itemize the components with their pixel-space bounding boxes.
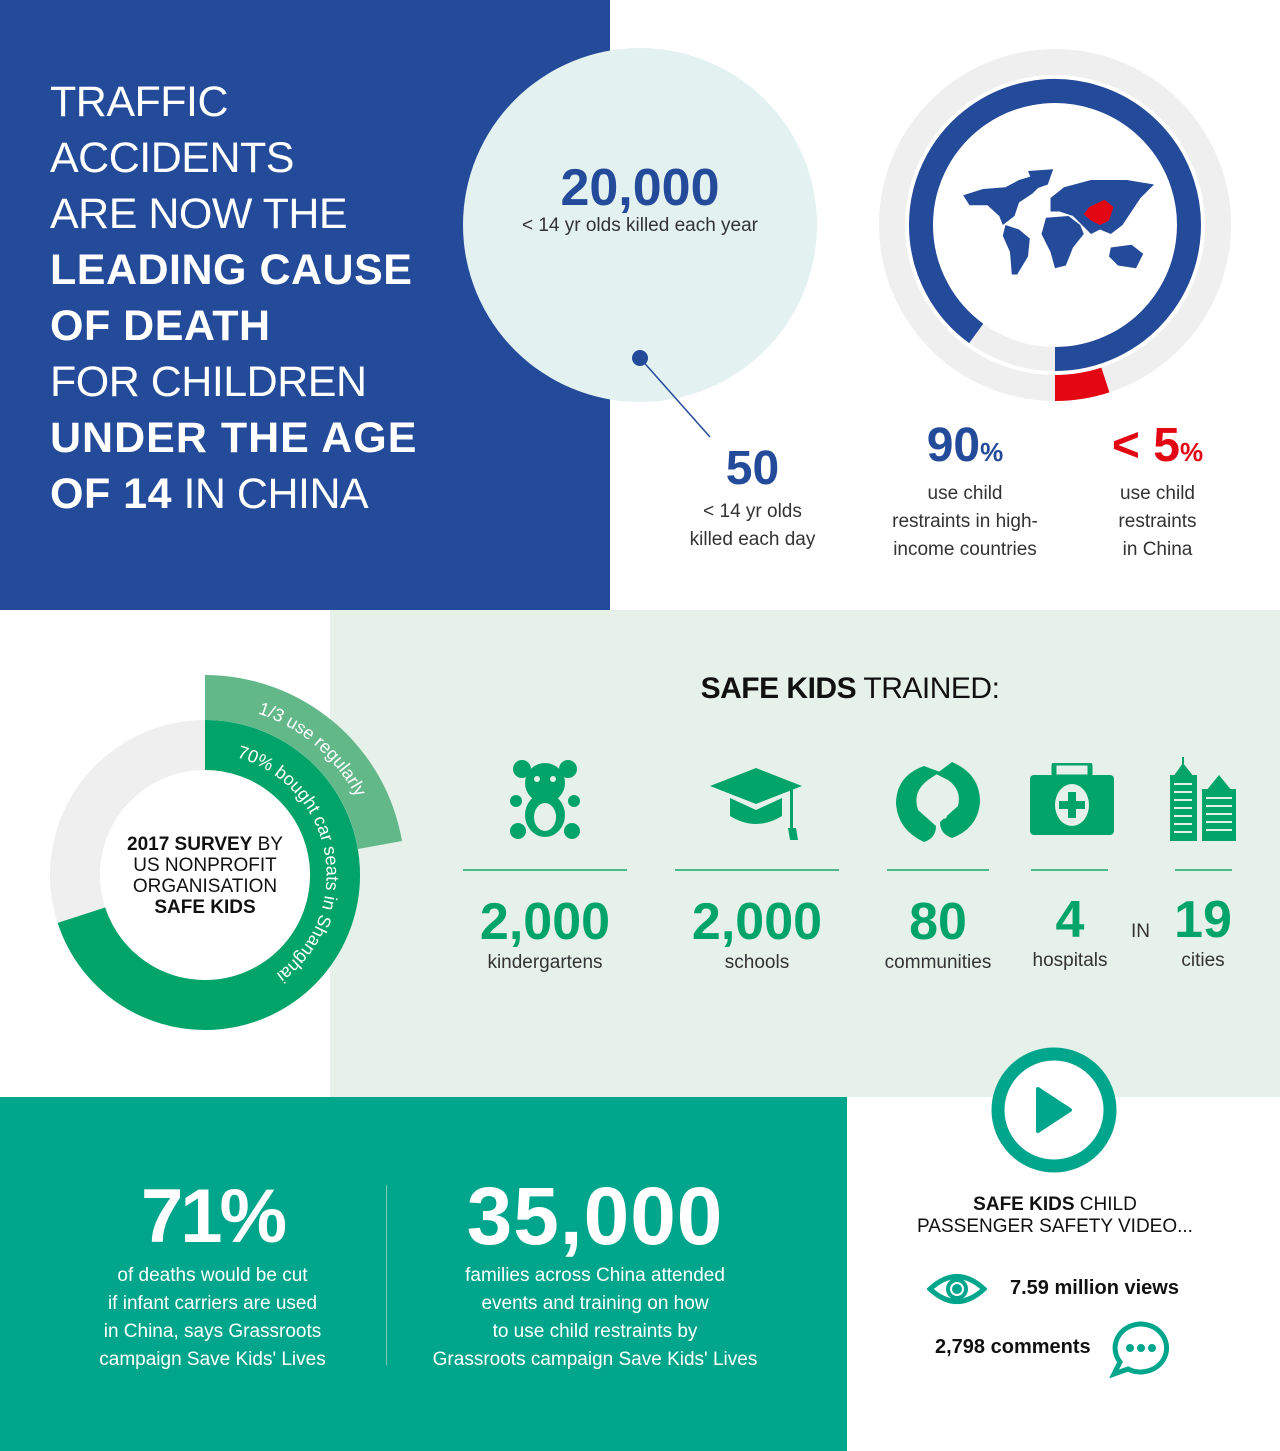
circle stat: 20,000: < 14 yr olds killed each year bbox=[522, 215, 758, 236]
title: TRAFFIC bbox=[50, 78, 228, 126]
stat: 71%: 71% bbox=[141, 1174, 284, 1259]
stat: communities: 80 bbox=[909, 893, 967, 951]
stat: communities bbox=[885, 893, 991, 973]
circle stat: 20,000 bbox=[463, 48, 817, 402]
connector line bbox=[632, 350, 710, 438]
stat: 35,000: 35,000 bbox=[467, 1171, 723, 1262]
stat: 71%: campaign Save Kids' Lives bbox=[99, 1349, 326, 1370]
text: survey label: US NONPROFIT bbox=[133, 855, 277, 876]
stat: 35,000 bbox=[433, 1171, 757, 1370]
text: survey label: 2017 SURVEY BY bbox=[127, 834, 283, 855]
stat: kindergartens: 2,000 bbox=[480, 893, 610, 951]
icon: hands bbox=[896, 762, 980, 842]
stat: communities: communities bbox=[885, 952, 991, 973]
stat: cities: 19 bbox=[1174, 891, 1232, 949]
stat: 71%: in China, says Grassroots bbox=[104, 1321, 321, 1342]
stat: cities: cities bbox=[1181, 950, 1225, 971]
icon: graduation cap bbox=[710, 768, 802, 840]
chart: survey donut: 70% bought car seats in Shanghai bbox=[240, 746, 338, 984]
stat: 35,000: to use child restraints by bbox=[493, 1321, 697, 1342]
stat: <5%: < 5% bbox=[1112, 419, 1203, 472]
stat: schools: 2,000 bbox=[692, 893, 822, 951]
text: survey label: ORGANISATION bbox=[133, 876, 277, 897]
stat: kindergartens: kindergartens bbox=[487, 952, 603, 973]
stat: 50 per day: killed each day bbox=[690, 529, 815, 550]
heading: safe kids trained: SAFE KIDS TRAINED: bbox=[701, 672, 999, 705]
icon: eye bbox=[927, 1274, 987, 1304]
icon: play button bbox=[992, 1048, 1116, 1172]
icon: speech bubble bbox=[1109, 1322, 1170, 1378]
title bbox=[50, 78, 417, 518]
icon: world map bbox=[963, 169, 1154, 274]
dividers and numbers bbox=[463, 869, 627, 871]
stat: 50 per day: 50 bbox=[726, 442, 779, 495]
stat: 71% bbox=[99, 1174, 326, 1370]
stat: 90%: restraints in high- bbox=[892, 511, 1038, 532]
stat: 50 per day: < 14 yr olds bbox=[703, 501, 802, 522]
text: comments: 2,798 comments bbox=[935, 1336, 1091, 1358]
stat: schools: schools bbox=[725, 952, 789, 973]
panel: blue headline bbox=[0, 0, 610, 610]
stat: 90%: use child bbox=[928, 483, 1002, 504]
chart: survey donut: 1/3 use regularly bbox=[258, 703, 365, 794]
text: survey label: SAFE KIDS bbox=[154, 897, 256, 918]
text: video title bbox=[917, 1194, 1193, 1237]
icon: first aid kit bbox=[1030, 763, 1114, 835]
panel: teal bottom bbox=[0, 1097, 847, 1451]
title: FOR CHILDREN bbox=[50, 358, 367, 406]
stat: 71%: if infant carriers are used bbox=[108, 1293, 317, 1314]
stat: 90% bbox=[892, 419, 1038, 560]
stat: 90%: 90% bbox=[927, 419, 1003, 472]
title: LEADING CAUSE bbox=[50, 246, 412, 294]
icon: teddy bear bbox=[510, 760, 580, 839]
text: survey label bbox=[127, 834, 283, 918]
title: OF 14 IN CHINA bbox=[50, 470, 368, 518]
stat: 50 per day bbox=[690, 442, 816, 550]
title: ARE NOW THE bbox=[50, 190, 347, 238]
stat: 35,000: events and training on how bbox=[481, 1293, 709, 1314]
text: views: 7.59 million views bbox=[1010, 1277, 1179, 1299]
icon: city buildings bbox=[1170, 757, 1236, 841]
title: ACCIDENTS bbox=[50, 134, 294, 182]
panel: light green trained bbox=[330, 610, 1280, 1097]
title: OF DEATH bbox=[50, 302, 271, 350]
chart: survey donut bbox=[50, 675, 402, 1030]
stat: hospitals: 4 bbox=[1056, 891, 1084, 949]
stat: <5%: use child bbox=[1120, 483, 1195, 504]
stat: hospitals: hospitals bbox=[1032, 950, 1108, 971]
text: IN bbox=[1131, 921, 1150, 942]
chart: world ring bbox=[879, 49, 1231, 401]
title: UNDER THE AGE bbox=[50, 414, 417, 462]
text: video title: PASSENGER SAFETY VIDEO... bbox=[917, 1216, 1193, 1237]
stat: 35,000: Grassroots campaign Save Kids' Lives bbox=[433, 1349, 757, 1370]
stat: hospitals bbox=[1032, 891, 1108, 971]
stat: 90%: income countries bbox=[893, 539, 1037, 560]
stat: <5% bbox=[1112, 419, 1203, 560]
stat: <5%: in China bbox=[1123, 539, 1192, 560]
stat: 71%: of deaths would be cut bbox=[117, 1265, 308, 1286]
stat: 35,000: families across China attended bbox=[465, 1265, 725, 1286]
stat: <5%: restraints bbox=[1118, 511, 1197, 532]
circle stat: 20,000: 20,000 bbox=[560, 159, 720, 217]
text: video title: SAFE KIDS CHILD bbox=[973, 1194, 1137, 1215]
